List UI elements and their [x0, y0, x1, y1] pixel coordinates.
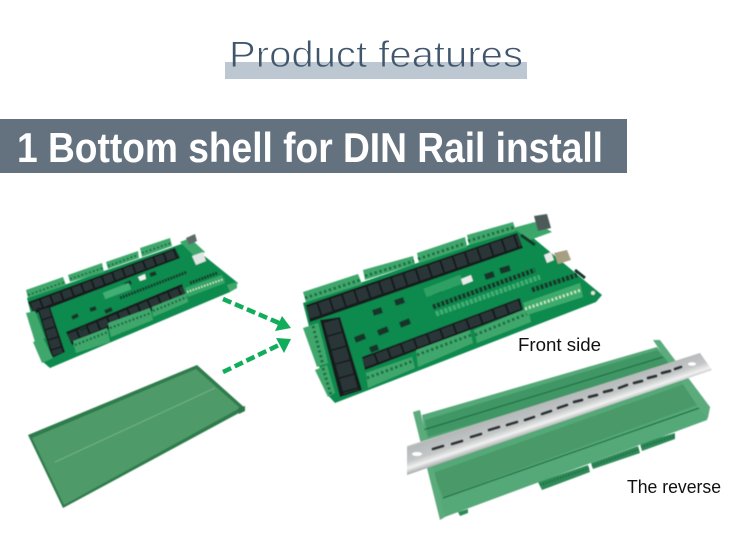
top terminal blocks — [303, 222, 516, 302]
bottom terminal blocks — [366, 308, 531, 388]
banner: Bottom shell for DIN Rail install: 1 Bottom shell for DIN Rail install — [17, 124, 603, 171]
left terminal blocks — [303, 323, 335, 397]
terminal blocks under shell — [458, 433, 675, 516]
chips and headers — [72, 234, 217, 330]
bottom terminal blocks — [73, 293, 188, 353]
terminal strip — [523, 283, 583, 315]
DIN rail mounted shell: reverse — [407, 340, 712, 520]
shell body — [422, 347, 710, 518]
top relay row — [28, 248, 180, 314]
left relay column — [320, 317, 362, 397]
bottom relay row — [362, 298, 523, 370]
top relay row — [306, 233, 523, 322]
arrow: shell to assembled — [223, 338, 291, 372]
chips, headers and connectors — [355, 214, 595, 350]
heading: Product features: Product features — [229, 34, 523, 75]
inner lower panel — [433, 383, 703, 497]
label: The reverse: The reverse — [627, 477, 721, 497]
small relay board — [26, 234, 238, 368]
metal rail — [407, 353, 712, 475]
assembled relay board: front side — [303, 214, 602, 403]
bottom shell — [28, 365, 245, 508]
top terminal blocks — [26, 238, 172, 298]
upper channel — [425, 350, 672, 437]
arrow: board to assembled — [223, 299, 291, 331]
label: Front side: Front side — [518, 335, 601, 355]
left relay column — [37, 307, 65, 358]
bottom relay row — [66, 284, 186, 345]
end caps — [413, 410, 445, 520]
left terminal blocks — [26, 311, 53, 363]
terminal strip and connector — [185, 275, 237, 297]
